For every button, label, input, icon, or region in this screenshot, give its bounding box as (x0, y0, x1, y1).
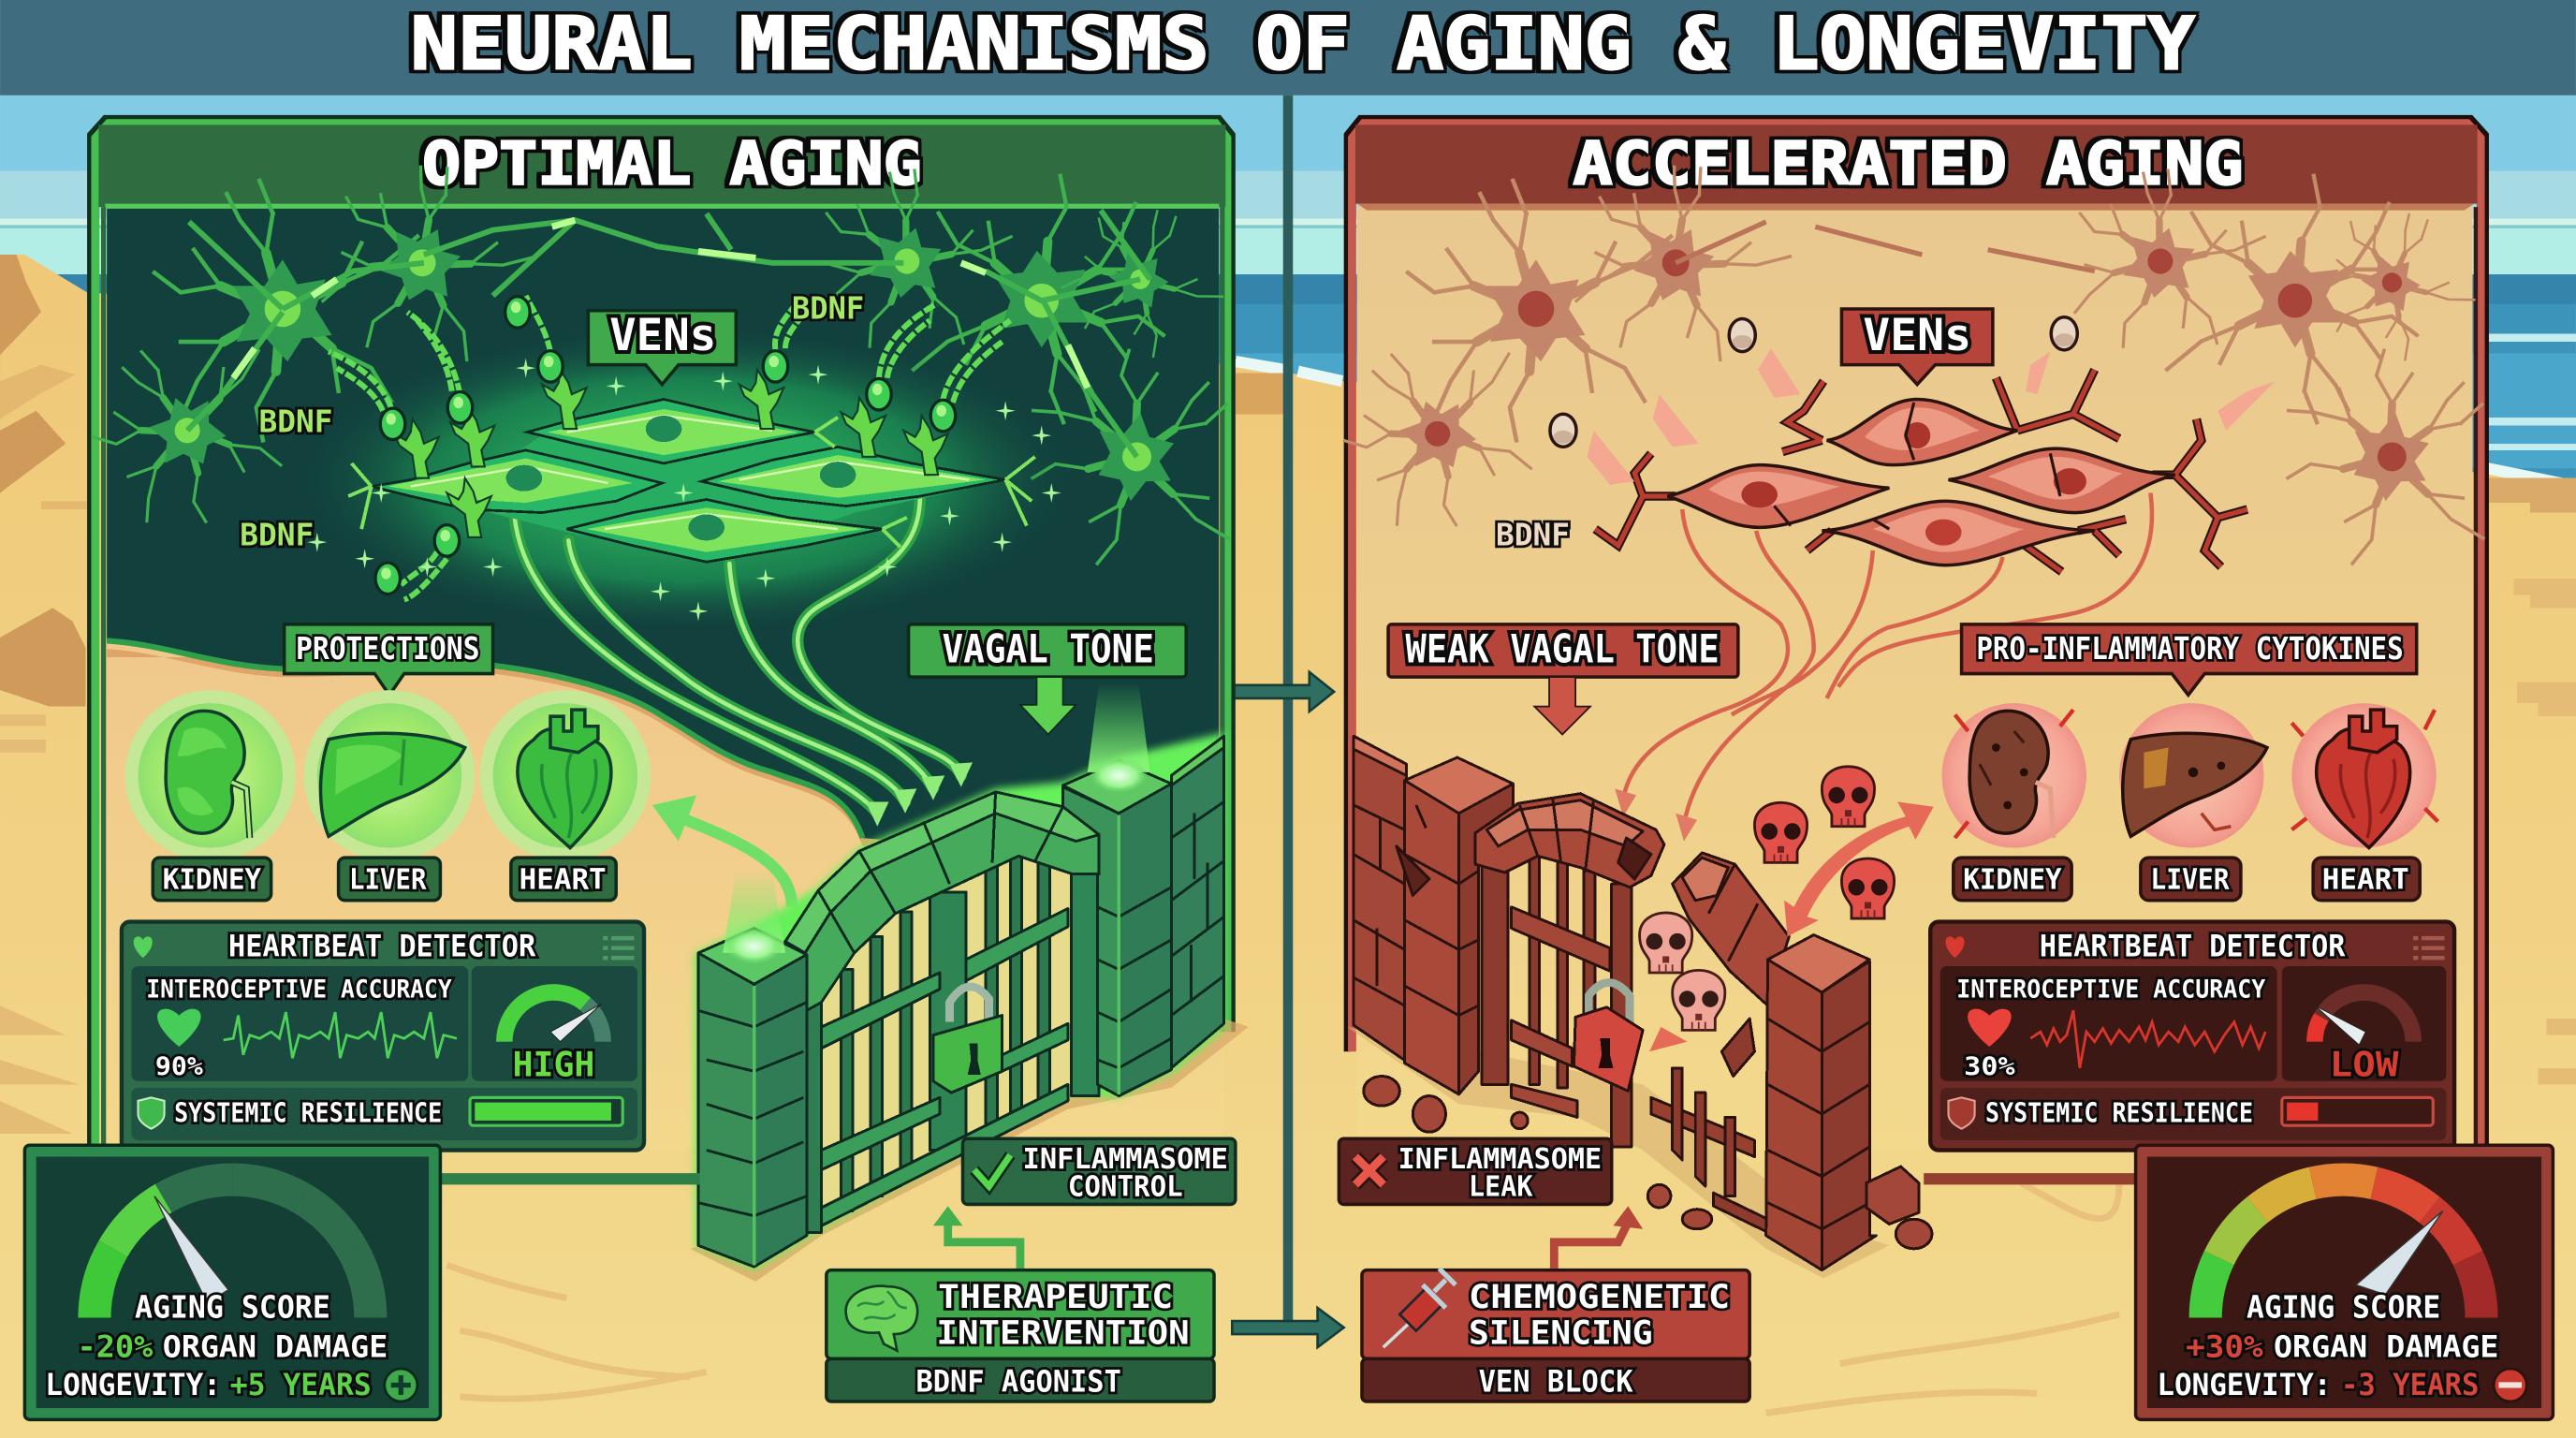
panel: accelerated aging (1323, 118, 2525, 1401)
minus icon (2494, 1369, 2526, 1401)
systemic resilience row: SYSTEMIC RESILIENCE (174, 1098, 442, 1129)
aging score card: accelerated: +30% (2186, 1331, 2263, 1365)
inflammasome control tag: CONTROL (1068, 1171, 1183, 1204)
chemogenetic silencing box: CHEMOGENETIC (1469, 1278, 1730, 1316)
heart icon 30% (1968, 1009, 2012, 1047)
chemogenetic silencing box (1362, 1269, 1749, 1401)
liver label (339, 858, 440, 901)
kidney label: KIDNEY (1963, 863, 2062, 896)
left pillar (1405, 781, 1459, 1094)
interoceptive readout: 90% (155, 1053, 203, 1081)
gauge arc (2205, 1180, 2481, 1318)
left dunes (0, 255, 85, 707)
rubble (1866, 1167, 1919, 1224)
connector to gate (1924, 1173, 2136, 1184)
VEN glow (292, 324, 1081, 636)
connector to gate (440, 1173, 700, 1184)
rails (822, 909, 1068, 1225)
red damage arrows (1649, 801, 1934, 1051)
axon arrowheads (866, 762, 973, 827)
left wall (1354, 736, 1406, 1062)
lower panel floor (98, 624, 1224, 1151)
fallen arch (1673, 853, 1789, 1005)
withered neurons (1323, 135, 2525, 594)
padlock (949, 987, 989, 1022)
organ: damaged liver (2119, 703, 2267, 848)
BDNF labels: BDNF (258, 404, 332, 440)
left pillar (698, 953, 754, 1267)
VENs callout: VENs (609, 310, 716, 361)
inflammasome leak tag: INFLAMMASOME (1398, 1143, 1602, 1176)
therapeutic intervention box (827, 1270, 1214, 1401)
damaged axons (1625, 493, 2152, 816)
vagal tone callout: VAGAL TONE (943, 625, 1154, 671)
right wall (1171, 736, 1224, 1068)
gauge arc (95, 1180, 371, 1318)
organ: heart (480, 690, 651, 861)
menu icon (2413, 938, 2445, 958)
low gauge (2282, 966, 2446, 1085)
protections callout (285, 624, 493, 695)
menu icon (603, 938, 634, 958)
VENs callout (588, 310, 736, 385)
BDNF beads (373, 295, 957, 595)
aging score card: accelerated (2136, 1145, 2553, 1419)
arch (1475, 794, 1664, 888)
small heart icon (1946, 936, 1965, 958)
kidney label (153, 858, 271, 901)
padlock (1588, 983, 1630, 1032)
gate ground shadow (1347, 1027, 1889, 1278)
VEN cells (348, 399, 1035, 562)
interoceptive readout: 30% (1964, 1053, 2015, 1081)
receptors (394, 370, 948, 537)
aging score card: accelerated: AGING SCORE (2247, 1289, 2440, 1326)
lower panel floor (1357, 207, 2472, 1151)
axon arrowheads (1615, 788, 1697, 842)
gate bars (1482, 855, 1632, 1147)
aging score card: optimal: ORGAN DAMAGE (163, 1331, 388, 1365)
heart label (2313, 858, 2420, 901)
organ: damaged heart (2291, 703, 2438, 848)
aging score card: optimal: LONGEVITY: (45, 1369, 221, 1402)
gate bars (842, 856, 1050, 1211)
pillar lights (723, 871, 785, 953)
protections callout: PROTECTIONS (296, 630, 480, 667)
interoceptive readout: INTEROCEPTIVE ACCURACY (1956, 976, 2265, 1004)
dead BDNF beads (1548, 315, 2079, 448)
liver label: LIVER (2150, 863, 2230, 896)
kidney label (1954, 858, 2071, 901)
gate opening (822, 856, 1073, 1224)
BDNF label: BDNF (1496, 517, 1570, 553)
center divider with arrows (1232, 95, 1344, 1347)
heart label (511, 858, 616, 901)
inflammasome control tag (963, 1138, 1236, 1204)
organ: kidney (124, 690, 296, 861)
title bar (0, 0, 2576, 95)
aging score card: accelerated: -3 YEARS (2341, 1369, 2479, 1402)
heart label: HEART (2322, 863, 2409, 896)
pro-inflammatory cytokines callout (1962, 624, 2417, 695)
damaged VEN cells (1595, 370, 2247, 572)
panel heading: OPTIMAL AGING (422, 129, 922, 198)
gate glow (695, 733, 1224, 1270)
aging score card: accelerated: ORGAN DAMAGE (2274, 1331, 2498, 1365)
systemic resilience row (131, 1088, 637, 1140)
aging score card: optimal: -20% (78, 1331, 153, 1365)
aging score card: optimal: AGING SCORE (135, 1289, 330, 1326)
right pillar (1063, 787, 1119, 1096)
detector heading: HEARTBEAT DETECTOR (2040, 930, 2346, 963)
pro-inflammatory cytokines callout: PRO-INFLAMMATORY CYTOKINES (1976, 630, 2404, 667)
VENs callout: VENs (1863, 310, 1971, 361)
liver label: LIVER (349, 863, 427, 896)
plus icon (385, 1369, 417, 1401)
VENs callout (1841, 309, 1993, 385)
liver label (2141, 858, 2241, 901)
needle (154, 1196, 228, 1303)
detector heading: HEARTBEAT DETECTOR (228, 930, 536, 963)
heartbeat detector panel (1930, 922, 2454, 1151)
systemic resilience row (1940, 1088, 2446, 1140)
brain icon (846, 1286, 917, 1351)
rails (1512, 907, 1610, 1117)
therapeutic intervention box: THERAPEUTIC (938, 1278, 1173, 1316)
BDNF comet trails (329, 296, 1010, 600)
inflammasome leak tag (1339, 1138, 1612, 1204)
interoceptive readout (131, 966, 468, 1081)
faded comet trails (1587, 348, 2276, 485)
BDNF labels (240, 289, 864, 553)
vagal axon tracts (514, 496, 961, 814)
arch (785, 792, 1099, 1019)
frame (1347, 118, 2485, 1151)
heart label: HEART (520, 863, 607, 896)
interoceptive readout (1940, 966, 2277, 1081)
low gauge: LOW (2330, 1045, 2399, 1085)
right pillar (1766, 960, 1822, 1270)
needle (2356, 1211, 2443, 1295)
aging score card: accelerated: LONGEVITY: (2157, 1369, 2331, 1402)
heartbeat detector panel (122, 922, 644, 1151)
therapeutic intervention box: INTERVENTION (936, 1314, 1190, 1353)
gate ground shadow (690, 1019, 1249, 1282)
interoceptive readout: INTEROCEPTIVE ACCURACY (146, 976, 452, 1004)
jambs (792, 1003, 822, 1232)
BDNF labels: BDNF (240, 517, 314, 553)
ECG trace (224, 1012, 457, 1058)
aging score card: optimal (24, 1145, 440, 1419)
syringe icon (1383, 1269, 1456, 1347)
skulls (1640, 767, 1895, 1030)
intervention arrow (948, 1223, 1020, 1269)
systemic resilience row: SYSTEMIC RESILIENCE (1985, 1098, 2253, 1129)
title text: NEURAL MECHANISMS OF AGING & LONGEVITY (411, 3, 2195, 87)
inflammasome control tag: INFLAMMASOME (1023, 1143, 1228, 1176)
therapeutic intervention box: BDNF AGONIST (915, 1366, 1121, 1400)
background neurons (72, 135, 1270, 594)
vagal tone callout (909, 624, 1186, 734)
broken fence (1651, 1097, 1754, 1157)
BDNF labels: BDNF (792, 289, 864, 326)
organ: damaged kidney (1942, 703, 2086, 848)
panel heading: ACCELERATED AGING (1573, 129, 2244, 198)
sand ripples (446, 1183, 2119, 1413)
silencing arrow (1554, 1223, 1628, 1269)
neural field dark background (107, 207, 1219, 871)
chemogenetic silencing box: SILENCING (1469, 1314, 1653, 1353)
chemogenetic silencing box: VEN BLOCK (1479, 1366, 1633, 1400)
frame (91, 118, 1232, 1151)
aging score card: optimal: +5 YEARS (230, 1369, 372, 1402)
erratic ECG trace (2030, 1010, 2265, 1068)
sparkles (307, 359, 1061, 621)
heart icon 90% (157, 1009, 201, 1047)
high gauge: HIGH (513, 1045, 594, 1085)
weak vagal tone callout (1388, 624, 1738, 734)
small heart icon (134, 936, 153, 958)
green arrow: vagal signal to organs (652, 795, 792, 907)
kidney label: KIDNEY (163, 863, 261, 896)
weak vagal tone callout: WEAK VAGAL TONE (1405, 625, 1720, 671)
panel: optimal aging (72, 118, 1270, 1401)
stone gate: strong (690, 682, 1249, 1282)
inflammasome leak tag: LEAK (1469, 1171, 1533, 1204)
crumbling gate (1347, 736, 1932, 1278)
organ: liver (304, 690, 475, 861)
high gauge (472, 966, 637, 1085)
